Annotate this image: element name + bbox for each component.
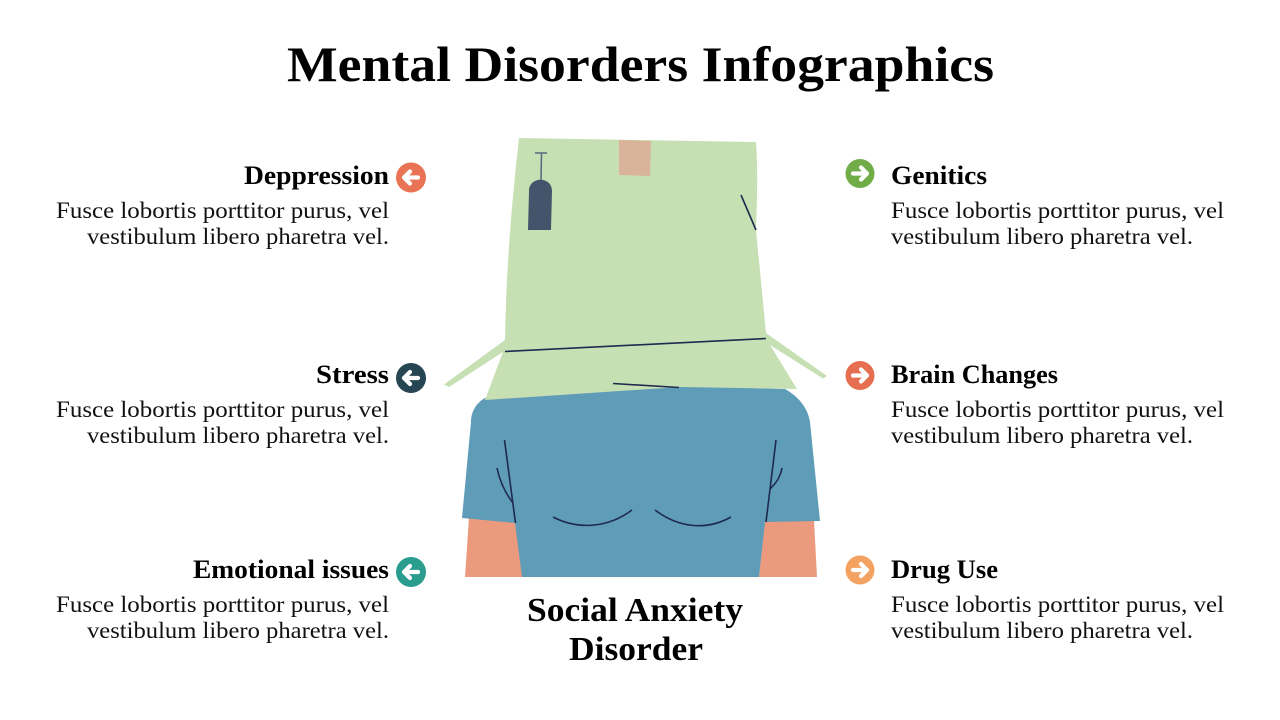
item: Emotional issues: Emotional issues [193, 555, 389, 584]
item: Genitics [846, 159, 1224, 249]
right arm [759, 520, 817, 577]
item: Stress: Stress [316, 360, 389, 389]
item: Brain Changes: Brain Changes [891, 360, 1058, 389]
item: Brain Changes: Fusce lobortis porttitor purus, vel [891, 397, 1224, 422]
item: Genitics: Genitics [891, 161, 987, 190]
bag tag [528, 153, 552, 230]
item: Drug Use: vestibulum libero pharetra vel. [891, 618, 1193, 643]
item: Stress [56, 360, 426, 448]
item: Brain Changes: vestibulum libero pharetra vel. [891, 423, 1193, 448]
paper bag [444, 138, 827, 400]
title: Mental Disorders Infographics [287, 36, 994, 92]
item: Drug Use: Drug Use [891, 555, 998, 584]
item: Stress: Fusce lobortis porttitor purus, vel [56, 397, 389, 422]
item: Emotional issues: vestibulum libero pharetra vel. [87, 618, 389, 643]
item: Drug Use: Fusce lobortis porttitor purus, vel [891, 592, 1224, 617]
bag patch [619, 140, 651, 176]
item: Emotional issues [56, 555, 426, 643]
item: Brain Changes [846, 360, 1224, 448]
item: Deppression: Deppression [244, 161, 390, 190]
item: Genitics: Fusce lobortis porttitor purus, vel [891, 198, 1224, 223]
illustration: person with paper bag over head [444, 138, 827, 577]
illustration caption [527, 592, 743, 668]
illustration caption: Disorder [569, 631, 703, 668]
item: Deppression: Fusce lobortis porttitor purus, vel [56, 198, 389, 223]
item: Stress: vestibulum libero pharetra vel. [87, 423, 389, 448]
left arm [465, 517, 523, 577]
item: Deppression: vestibulum libero pharetra vel. [87, 224, 389, 249]
illustration caption: Social Anxiety [527, 592, 743, 629]
item: Drug Use [846, 555, 1224, 643]
shirt [462, 386, 820, 577]
item: Genitics: vestibulum libero pharetra vel. [891, 224, 1193, 249]
item: Deppression [56, 161, 426, 249]
fold and shirt creases [497, 195, 782, 526]
item: Emotional issues: Fusce lobortis porttitor purus, vel [56, 592, 389, 617]
